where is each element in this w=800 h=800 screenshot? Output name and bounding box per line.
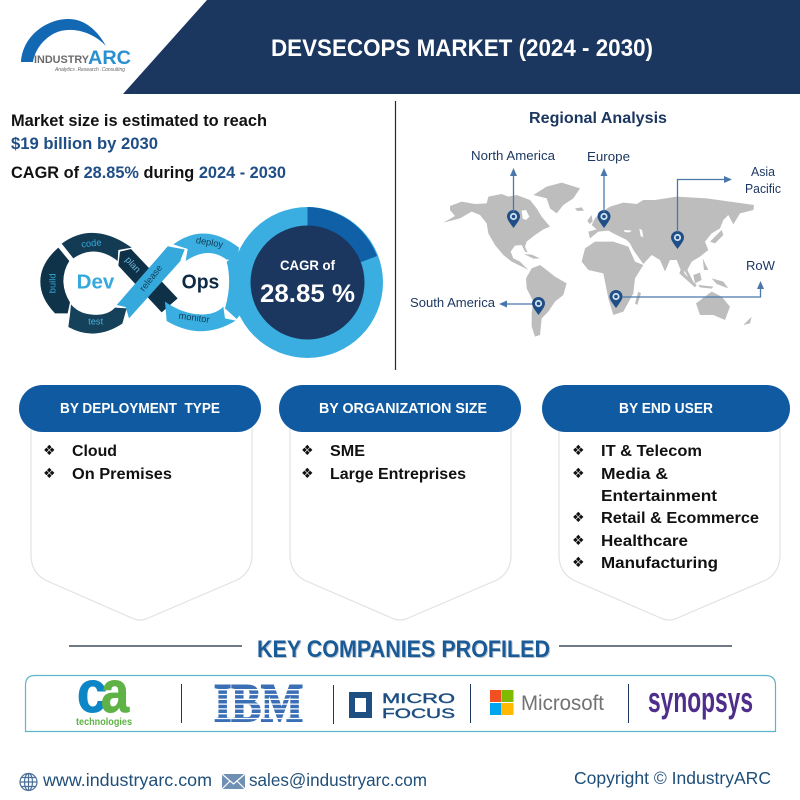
devops infinity loop: code — [81, 237, 102, 249]
region labels: South America — [410, 296, 495, 310]
monitor segment — [165, 302, 236, 331]
region labels: North America — [471, 149, 555, 163]
footer website: www.industryarc.com — [42, 770, 212, 790]
heading: key companies profiled: KEY COMPANIES PROFILED — [258, 637, 551, 664]
heading: key companies profiled — [69, 636, 732, 664]
panel: by deployment type — [19, 385, 261, 620]
market size text: CAGR of 28.85% during 2024 - 2030 — [11, 164, 286, 182]
footer email: sales@industryarc.com — [249, 770, 427, 790]
panel: by deployment type: ❖ — [43, 466, 56, 482]
devops infinity loop: deploy — [195, 235, 224, 250]
logo: CA technologies — [76, 660, 132, 728]
arrows — [499, 168, 764, 308]
logo: CA technologies: c — [77, 660, 107, 725]
panel: by organization size: BY ORGANIZATION SIZE — [319, 401, 487, 417]
CAGR donut — [232, 207, 383, 358]
release band — [117, 246, 186, 318]
logo: Micro Focus: FOCUS — [382, 705, 455, 721]
test segment — [68, 304, 127, 334]
region labels: RoW — [746, 259, 775, 273]
panel: by end user: BY END USER — [619, 401, 713, 417]
panel: by organization size: ❖ — [301, 466, 314, 482]
logo: IndustryARC: Analytics .Research .Consulting — [54, 67, 125, 73]
americas and greenland — [443, 183, 584, 337]
region labels — [410, 149, 781, 310]
logo: CA technologies: a — [101, 660, 130, 725]
footer copyright: Copyright © IndustryARC — [574, 768, 771, 788]
panel: by organization size: ❖ — [301, 443, 314, 459]
panel: by organization size: Large Entreprises — [330, 466, 466, 483]
panel: by organization size — [279, 385, 521, 620]
panel: by end user: IT & Telecom — [601, 443, 702, 460]
region labels: Asia — [751, 165, 775, 179]
company logos box — [26, 660, 776, 733]
market size text — [11, 112, 286, 182]
panel: by end user: Retail & Ecommerce — [601, 510, 759, 527]
market size text: Market size is estimated to reach — [11, 112, 267, 130]
panel: by end user: Healthcare — [601, 533, 688, 550]
header banner — [123, 0, 800, 94]
old world — [582, 197, 754, 325]
region labels: Pacific — [745, 182, 781, 196]
build segment — [40, 248, 70, 313]
panel: by organization size: SME — [330, 443, 365, 460]
devops infinity loop: plan — [123, 255, 143, 275]
logo: IndustryARC: ARC — [88, 48, 131, 69]
deploy segment — [173, 233, 239, 261]
logo: Microsoft — [490, 690, 604, 715]
icon: mail — [222, 774, 245, 789]
regional analysis heading: Regional Analysis — [529, 110, 667, 127]
devops infinity loop: Dev — [77, 270, 115, 293]
panel: by deployment type: BY DEPLOYMENT TYPE — [60, 401, 220, 417]
panel: by end user: ❖ — [572, 533, 585, 549]
devops infinity loop — [40, 233, 252, 334]
title: DEVSECOPS MARKET (2024 - 2030) — [271, 35, 653, 62]
panel: by end user: ❖ — [572, 466, 585, 482]
icon: globe — [20, 774, 37, 790]
panel: by end user — [542, 385, 790, 620]
ops ring right part — [225, 253, 252, 319]
devops infinity loop: Ops — [182, 270, 219, 293]
panel: by deployment type: Cloud — [72, 443, 117, 460]
logo: Micro Focus: MICRO — [382, 690, 455, 706]
region labels: Europe — [587, 150, 630, 164]
devops infinity loop: test — [88, 316, 104, 326]
market size text: $19 billion by 2030 — [11, 135, 158, 153]
panel: by end user: Manufacturing — [601, 555, 718, 572]
CAGR donut: CAGR of — [280, 257, 335, 273]
plan band — [118, 249, 178, 312]
devops infinity loop: monitor — [178, 311, 210, 325]
devops infinity loop: release — [138, 263, 164, 293]
world map — [410, 149, 781, 337]
logo: IndustryARC — [21, 19, 131, 73]
logo: IndustryARC: INDUSTRY — [34, 54, 90, 66]
panel: by end user: ❖ — [572, 555, 585, 571]
panel: by deployment type: On Premises — [72, 466, 172, 483]
devops infinity loop: build — [48, 273, 58, 293]
panel: by deployment type: ❖ — [43, 443, 56, 459]
panel: by end user: Entertainment — [601, 488, 718, 505]
logo: IBM: IBM — [214, 673, 303, 733]
logo: Micro Focus — [349, 690, 455, 721]
code segment — [62, 233, 132, 261]
logo: CA technologies: technologies — [76, 716, 132, 728]
logo: Microsoft: Microsoft — [521, 692, 604, 715]
pins — [507, 210, 684, 315]
panel: by end user: Media & — [601, 466, 668, 483]
panel: by end user: ❖ — [572, 443, 585, 459]
panel: by end user: ❖ — [572, 510, 585, 526]
heading: key companies profiled: KEY COMPANIES PROFILED — [257, 636, 550, 663]
CAGR donut: 28.85 % — [260, 280, 355, 308]
